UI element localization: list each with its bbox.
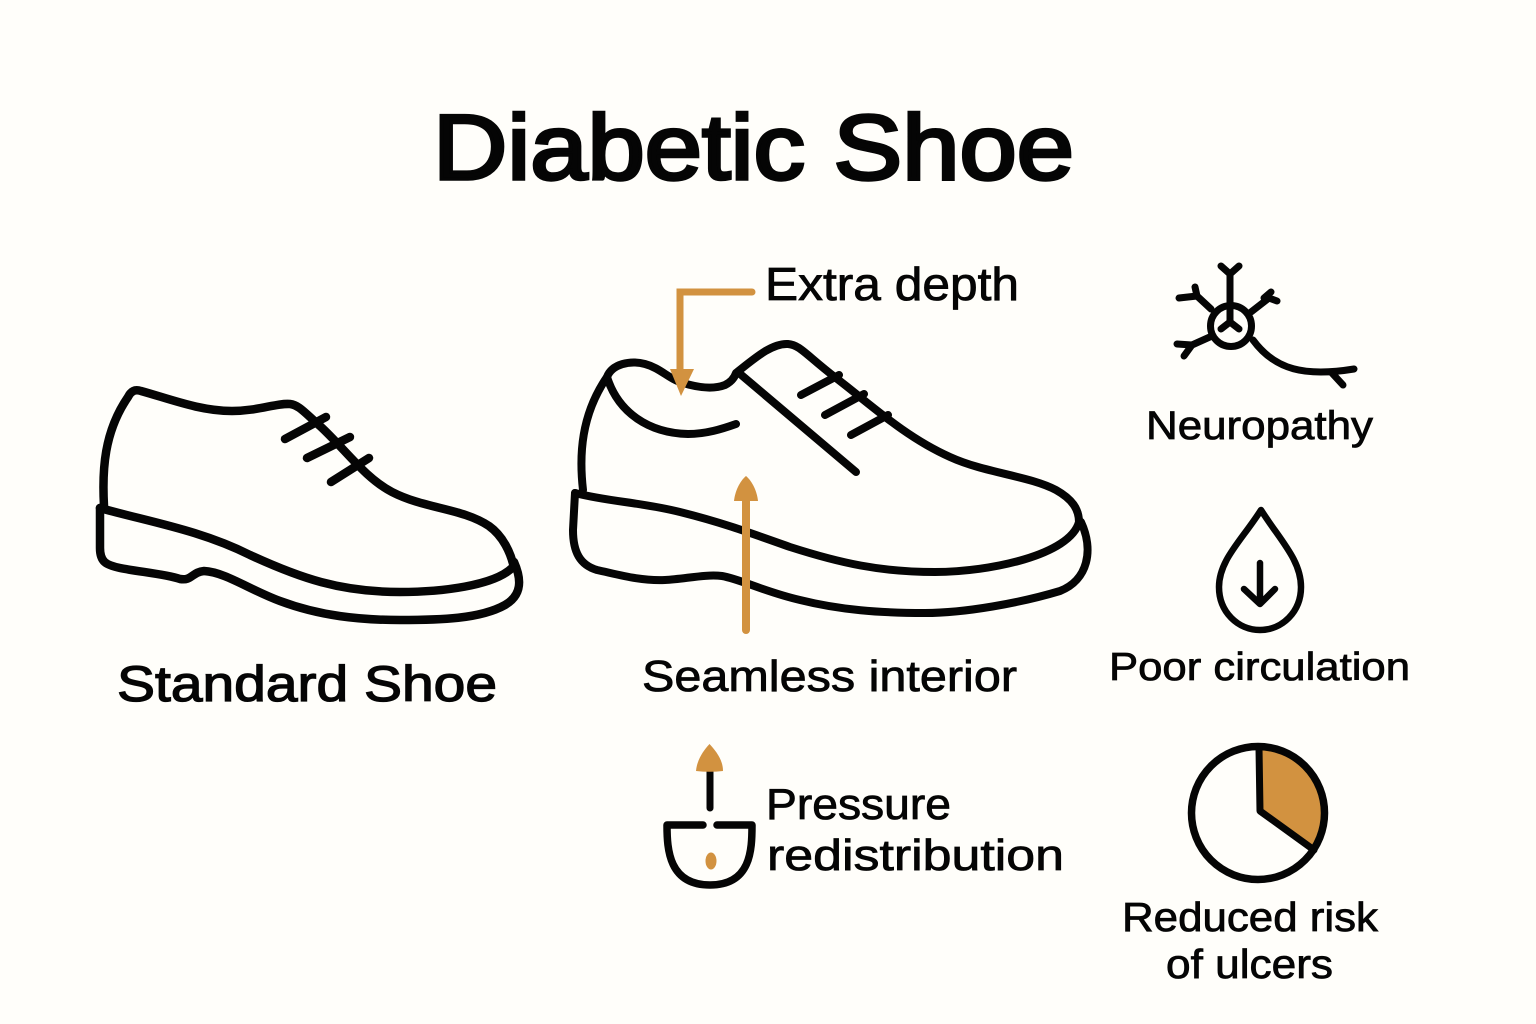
title: Diabetic Shoe bbox=[433, 97, 1074, 199]
icon: pressure redistribution bbox=[667, 744, 752, 885]
icon: poor circulation drop bbox=[1219, 510, 1301, 630]
label: reduced risk of ulcers bbox=[1122, 894, 1379, 987]
collar opening curve bbox=[607, 377, 736, 434]
label: pressure redistribution: Pressure bbox=[766, 780, 951, 829]
label: poor circulation: Poor circulation bbox=[1109, 646, 1410, 689]
label: pressure redistribution bbox=[766, 780, 1064, 880]
label: reduced risk of ulcers: of ulcers bbox=[1166, 941, 1333, 987]
laces bbox=[801, 375, 888, 435]
label: reduced risk of ulcers: Reduced risk bbox=[1122, 894, 1379, 940]
illustration: standard shoe bbox=[100, 390, 519, 620]
sole top line bbox=[100, 508, 513, 592]
label: extra depth: Extra depth bbox=[765, 258, 1019, 310]
label: seamless interior: Seamless interior bbox=[642, 652, 1017, 701]
illustration: diabetic shoe bbox=[573, 344, 1088, 613]
icon: neuropathy nerve cell bbox=[1177, 266, 1354, 385]
sole outline bbox=[100, 508, 519, 620]
icon: reduced risk pie chart bbox=[1192, 746, 1325, 880]
arrow: extra depth bbox=[670, 292, 752, 396]
sole outline bbox=[573, 493, 1088, 613]
label: neuropathy: Neuropathy bbox=[1146, 404, 1373, 448]
shoe upper with collar and tongue bbox=[581, 344, 1079, 522]
label: standard shoe: Standard Shoe bbox=[117, 656, 497, 712]
label: pressure redistribution: redistribution bbox=[767, 831, 1064, 880]
sole top line bbox=[575, 493, 1079, 572]
arrow: seamless interior bbox=[734, 476, 758, 630]
laces bbox=[285, 417, 369, 482]
tongue line bbox=[739, 373, 856, 472]
shoe upper bbox=[103, 390, 514, 568]
